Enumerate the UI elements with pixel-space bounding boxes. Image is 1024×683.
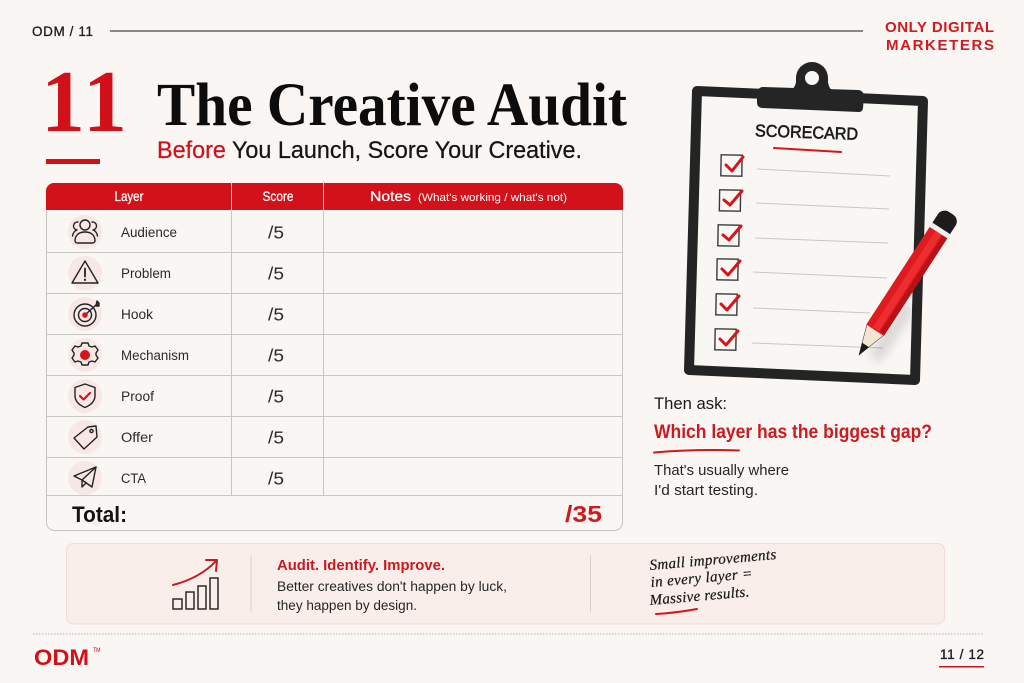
row: Hook: /5 bbox=[268, 304, 284, 324]
subtitle: Before You Launch, Score Your Creative. bbox=[157, 137, 582, 164]
handwritten note: Small improvements bbox=[649, 547, 777, 574]
banner text: Better creatives don't happen by luck, bbox=[277, 579, 507, 594]
row: Problem: Problem bbox=[121, 266, 171, 281]
row: Offer bbox=[68, 420, 284, 454]
header label: ODM / 11 bbox=[32, 24, 93, 39]
callout: then ask: Which layer has the biggest gap? bbox=[654, 422, 932, 443]
panel: bottom banner bbox=[66, 544, 944, 624]
row: Proof: /5 bbox=[268, 386, 284, 406]
row: Hook bbox=[68, 297, 284, 331]
table header: Layer bbox=[114, 188, 144, 204]
row: Proof bbox=[68, 379, 284, 413]
row: Mechanism: /5 bbox=[268, 346, 284, 366]
title: The Creative Audit bbox=[157, 72, 628, 139]
table header: (What's working / what's not) bbox=[418, 192, 567, 204]
row: Problem bbox=[68, 256, 284, 290]
table header bbox=[46, 183, 623, 210]
total row: /35 bbox=[565, 501, 602, 527]
row: Hook: Hook bbox=[121, 307, 153, 322]
handwritten note: Massive results. bbox=[648, 584, 750, 609]
panel: audit table bbox=[46, 183, 623, 530]
brand name: ONLY DIGITAL bbox=[885, 19, 994, 36]
banner text bbox=[277, 558, 507, 613]
section number: 11 bbox=[41, 54, 127, 151]
icon: red pencil bbox=[850, 208, 969, 367]
footer logo: ODM bbox=[34, 645, 89, 670]
row: CTA: CTA bbox=[121, 471, 146, 486]
row: CTA: /5 bbox=[268, 468, 284, 488]
page number: 11 / 12 bbox=[940, 647, 984, 662]
total row bbox=[72, 501, 602, 527]
row: Audience: /5 bbox=[268, 222, 284, 242]
callout: then ask: That's usually where bbox=[654, 462, 789, 479]
row: Audience bbox=[68, 215, 284, 249]
icon: clipboard scorecard bbox=[689, 62, 969, 380]
brand name bbox=[885, 19, 994, 54]
callout: then ask bbox=[654, 394, 932, 499]
brand name: MARKETERS bbox=[886, 37, 994, 54]
row: Audience: Audience bbox=[121, 225, 177, 240]
checklist bbox=[715, 155, 890, 350]
handwritten note bbox=[648, 547, 777, 614]
footer logo: TM bbox=[93, 647, 100, 654]
icon: growth chart bbox=[173, 560, 218, 609]
callout: then ask: Then ask: bbox=[654, 394, 727, 413]
row: Offer: /5 bbox=[268, 428, 284, 448]
clip bbox=[757, 62, 864, 112]
row: Proof: Proof bbox=[121, 389, 154, 404]
total row: Total: bbox=[72, 502, 127, 527]
table header: Notes bbox=[370, 188, 411, 204]
row: CTA bbox=[68, 461, 284, 495]
row: Mechanism: Mechanism bbox=[121, 348, 189, 363]
handwritten note: in every layer = bbox=[650, 566, 753, 591]
table header: Score bbox=[262, 188, 294, 204]
banner text: they happen by design. bbox=[277, 598, 417, 613]
callout: then ask: I'd start testing. bbox=[654, 482, 758, 499]
banner text: Audit. Identify. Improve. bbox=[277, 558, 445, 574]
row: Offer: Offer bbox=[121, 430, 154, 445]
scorecard heading: SCORECARD bbox=[755, 121, 858, 144]
row: Mechanism bbox=[68, 338, 284, 372]
row: Problem: /5 bbox=[268, 264, 284, 284]
